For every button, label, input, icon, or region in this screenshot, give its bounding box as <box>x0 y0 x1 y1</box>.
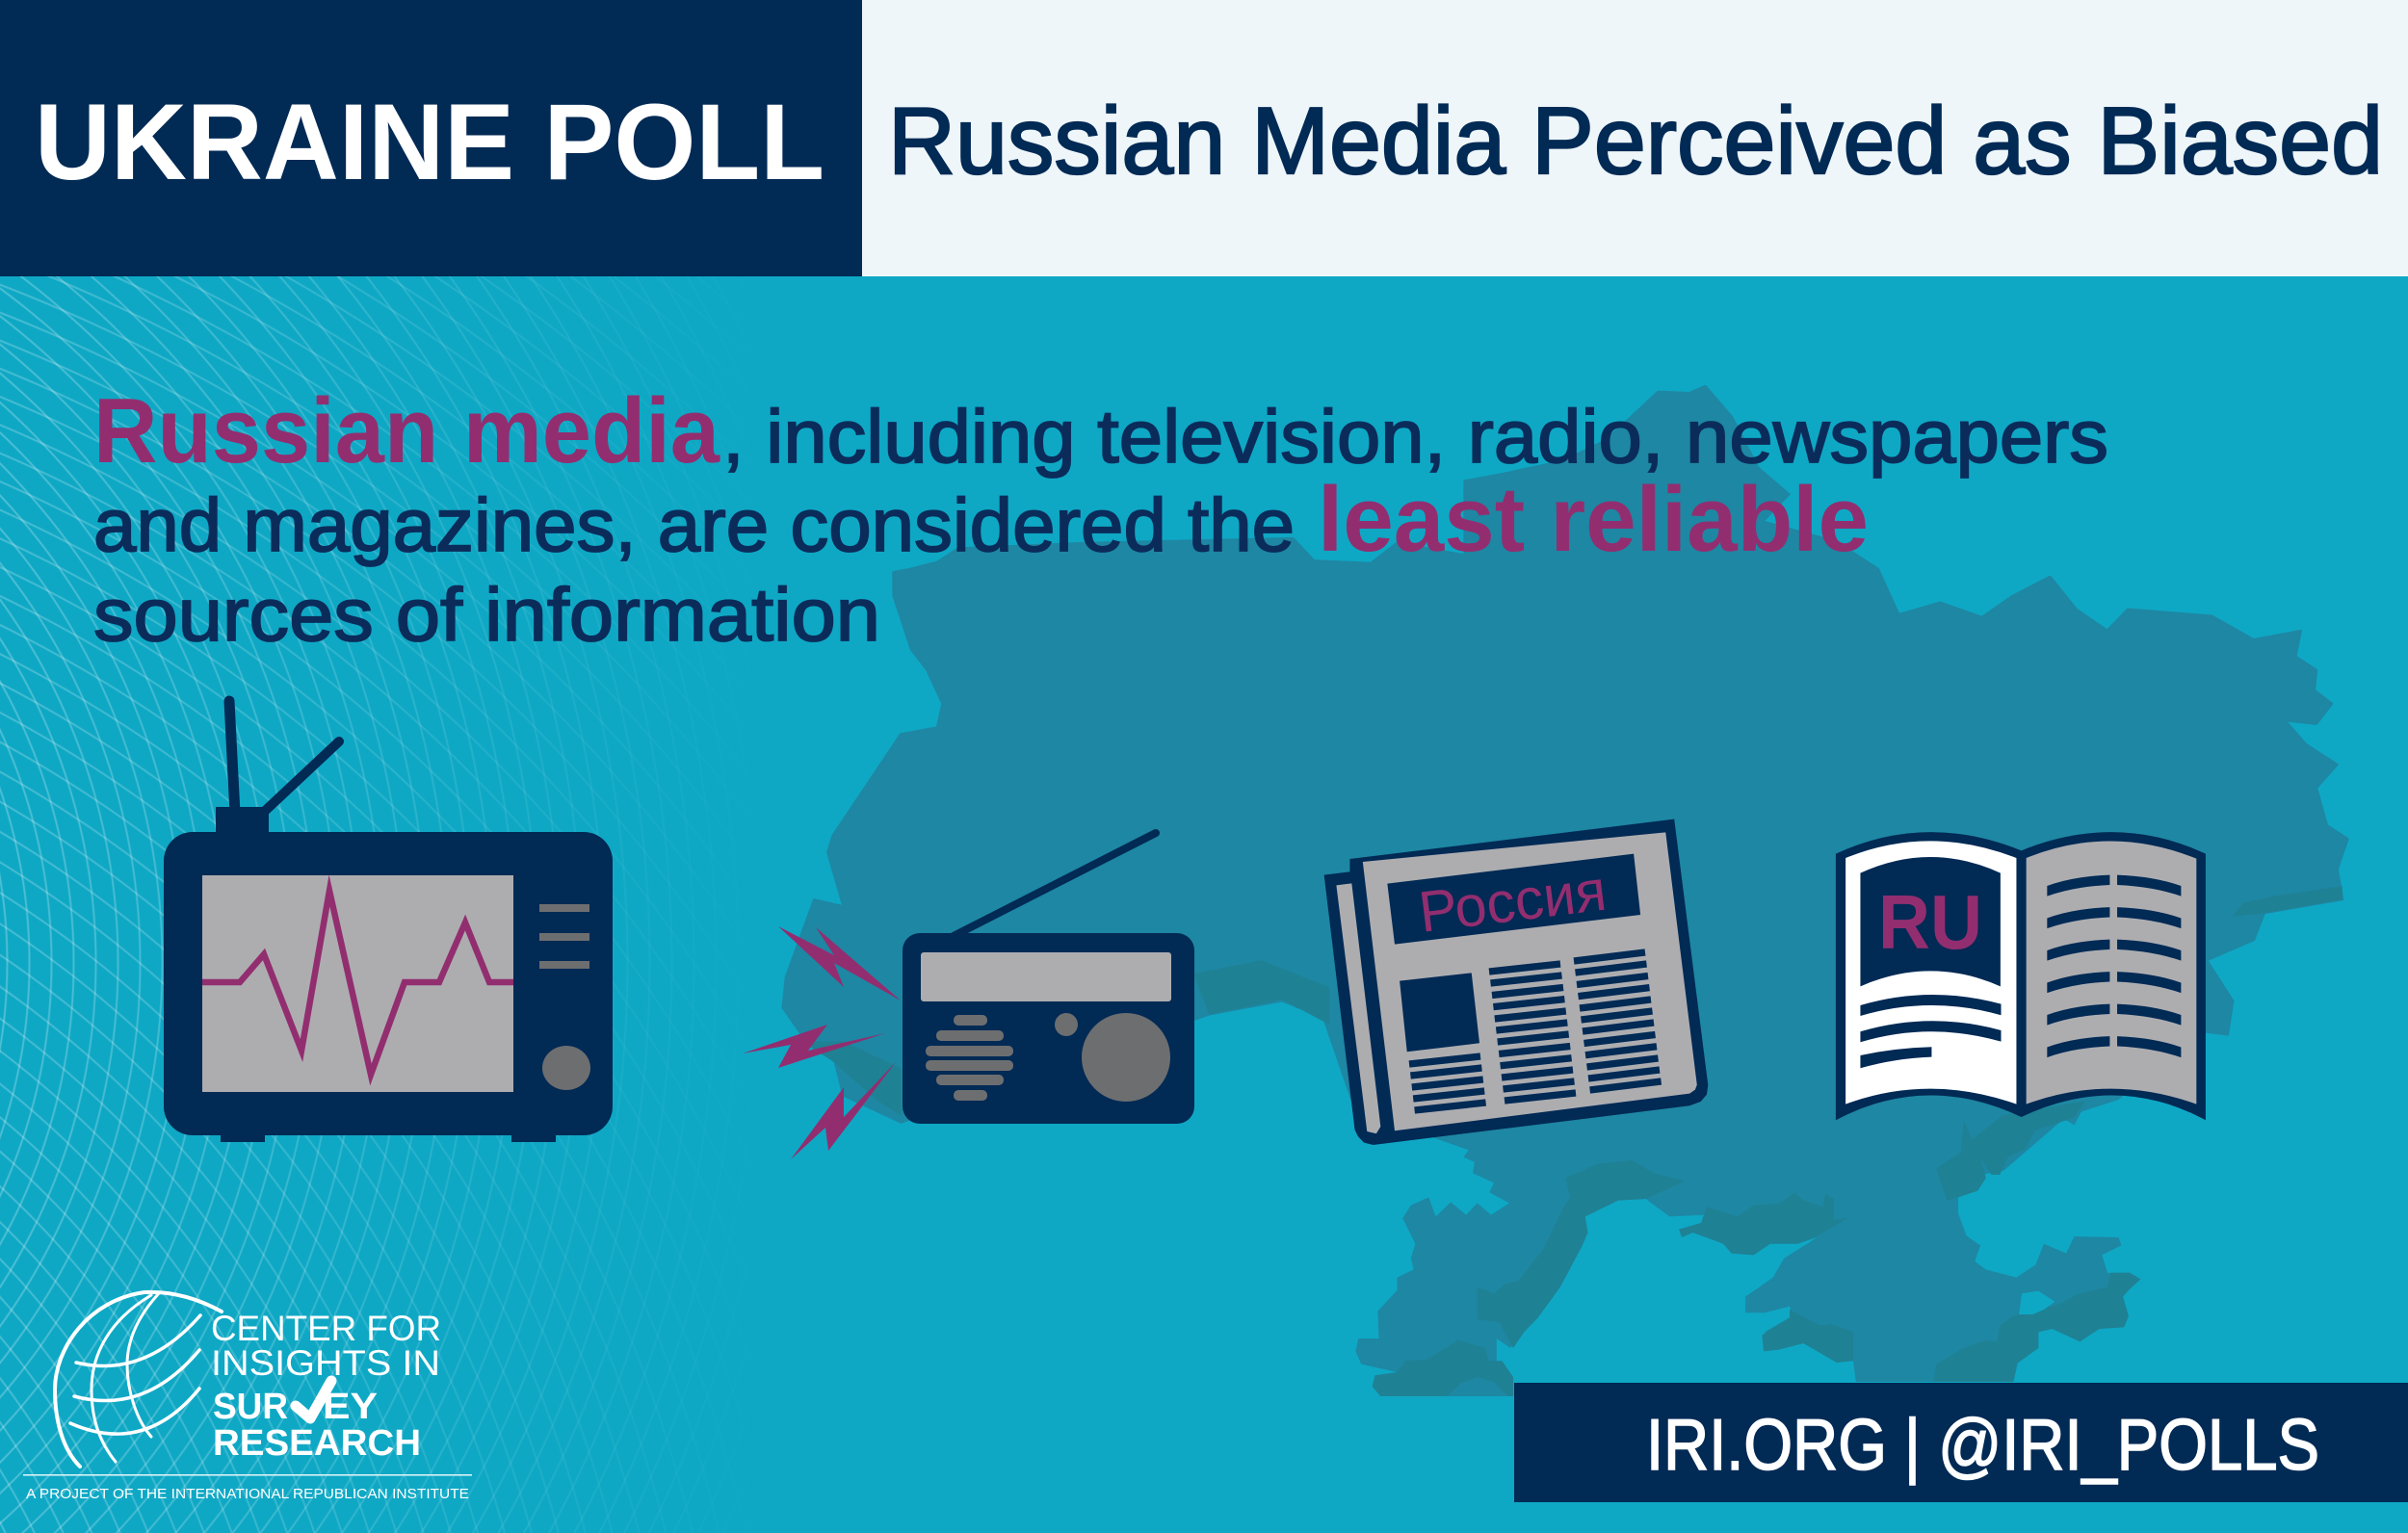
logo: Center for Insights in Survey Research <box>23 1292 472 1502</box>
text block: main statement: and magazines, are considered the <box>93 482 1295 567</box>
footer: website and handle bar <box>1514 1383 2408 1502</box>
text block: main statement: sources of information <box>93 572 880 657</box>
logo: Center for Insights in Survey Research: INSIGHTS IN <box>211 1343 440 1383</box>
icon: magazine <box>1836 832 2206 1120</box>
icon: television <box>164 701 613 1142</box>
logo: Center for Insights in Survey Research: SUR <box>213 1387 288 1427</box>
icon: radio <box>903 833 1194 1124</box>
header: title panel <box>0 0 862 276</box>
logo: Center for Insights in Survey Research: RESEARCH <box>213 1423 421 1464</box>
logo: Center for Insights in Survey Research: EY <box>323 1387 378 1427</box>
title: UKRAINE POLL: UKRAINE POLL <box>35 82 824 202</box>
map: Ukraine silhouette <box>783 386 2347 1396</box>
logo: Center for Insights in Survey Research: CENTER FOR <box>211 1309 441 1348</box>
footer: website and handle bar: IRI.ORG | @IRI_POLLS <box>1646 1404 2319 1485</box>
newspaper masthead: Россия: Россия <box>1415 858 1610 945</box>
text block: main statement <box>93 379 2108 657</box>
magazine cover label: RU: RU <box>1878 879 1982 965</box>
text block: main statement: Russian media <box>93 379 720 482</box>
header: subtitle panel <box>862 0 2408 276</box>
text block: main statement: least reliable <box>1318 468 1869 571</box>
logo: Center for Insights in Survey Research: A PROJECT OF THE INTERNATIONAL REPUBLICAN INSTITUTE <box>26 1486 469 1502</box>
text block: main statement: , including television, radio, newspapers <box>722 394 2108 479</box>
icon: radio sound bolts <box>743 926 901 1159</box>
icon: newspaper <box>1324 819 1708 1145</box>
logo globe <box>55 1292 222 1467</box>
subtitle: Russian Media Perceived as Biased: Russian Media Perceived as Biased <box>888 88 2383 194</box>
